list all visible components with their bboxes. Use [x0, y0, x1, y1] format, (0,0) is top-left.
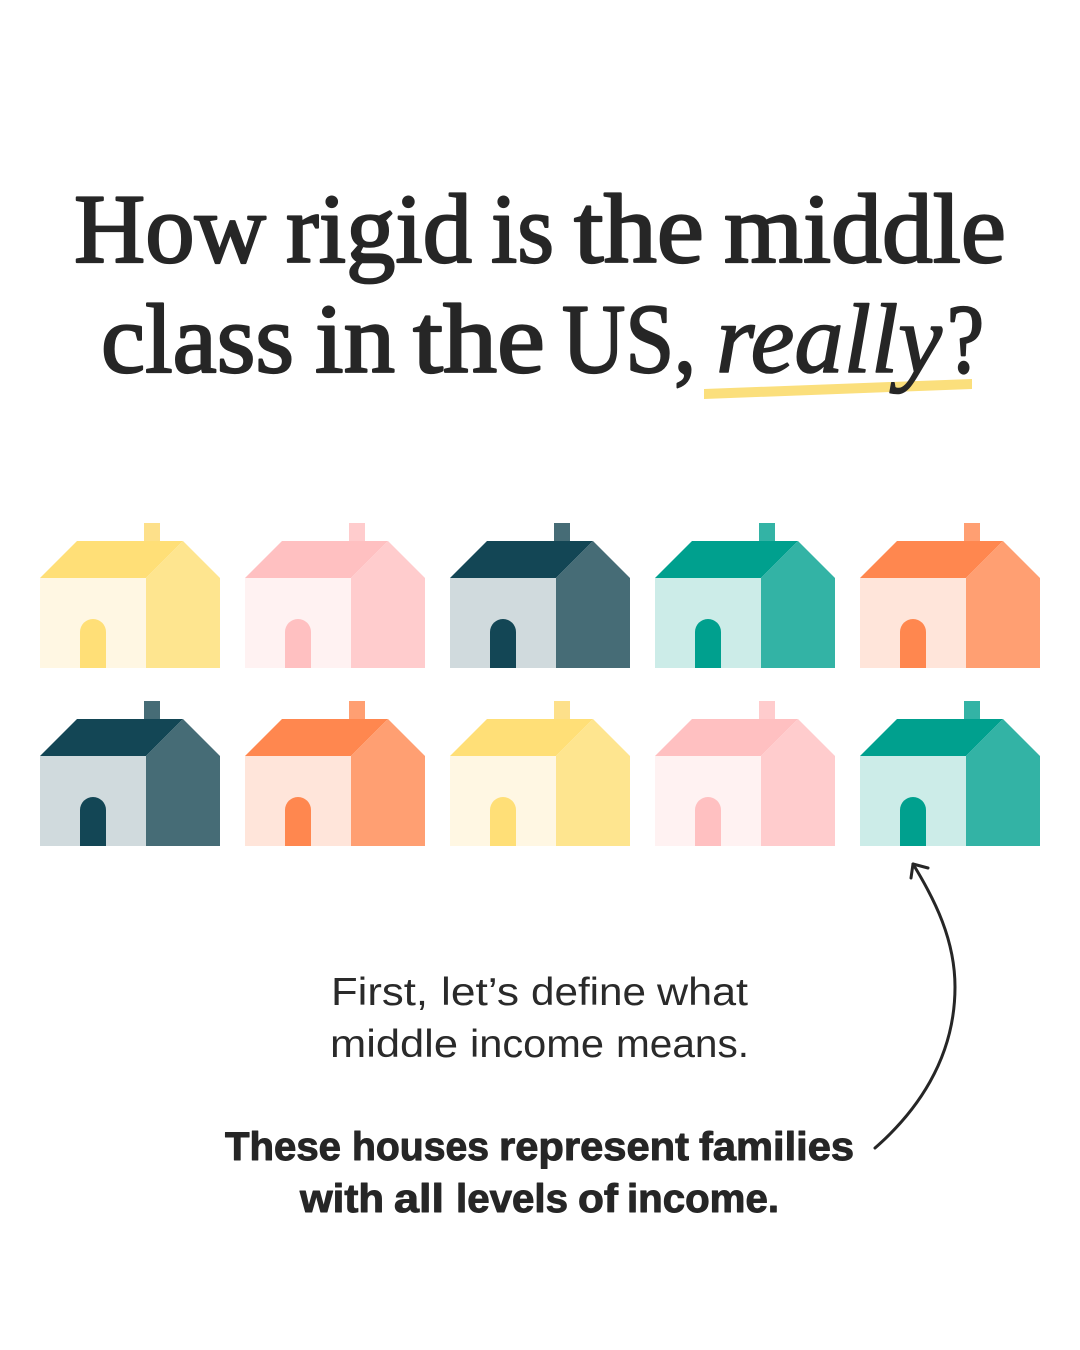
bold line 2: income. — [627, 1177, 779, 1221]
title — [74, 175, 1006, 399]
house: navy, row 2 — [40, 701, 220, 846]
title line 2: really — [716, 285, 942, 394]
intro text — [330, 971, 749, 1066]
intro line 1: let’s — [441, 971, 519, 1014]
bold line 2: levels — [456, 1177, 568, 1221]
house: orange, row 1 — [860, 523, 1040, 668]
bold line 2 — [299, 1177, 779, 1221]
arrow pointing to teal house — [875, 864, 955, 1148]
intro line 2: income — [470, 1023, 604, 1066]
house: teal, row 2 — [860, 701, 1040, 846]
title line 1: is — [491, 175, 554, 284]
intro line 2: means. — [616, 1023, 749, 1066]
title line 1: the — [574, 175, 704, 284]
intro line 2: middle — [330, 1023, 458, 1066]
title line 2: class — [101, 285, 294, 394]
title line 1: middle — [724, 175, 1006, 284]
bold line 1: families — [699, 1125, 854, 1169]
bold line 1: These — [225, 1125, 341, 1169]
intro line 1: what — [656, 971, 748, 1014]
title line 2: ? — [947, 285, 984, 394]
bold line 1: houses — [352, 1125, 489, 1169]
title line 1: rigid — [286, 175, 472, 284]
intro line 2 — [330, 1023, 749, 1066]
house: yellow, row 1 — [40, 523, 220, 668]
title line 2: US, — [562, 285, 696, 394]
bold line 1: represent — [499, 1125, 689, 1169]
title line 2: the — [413, 285, 545, 394]
house grid — [40, 523, 1040, 846]
bold line 2: with — [299, 1177, 384, 1221]
underline highlight — [704, 379, 972, 399]
bold line 2: of — [578, 1177, 619, 1221]
intro line 1: First, — [331, 971, 428, 1014]
house: orange, row 2 — [245, 701, 425, 846]
bold explanation text — [225, 1125, 854, 1221]
house: yellow, row 2 — [450, 701, 630, 846]
house: teal, row 1 — [655, 523, 835, 668]
house: pink, row 1 — [245, 523, 425, 668]
title line 1 — [74, 175, 1006, 284]
title line 2 — [101, 285, 984, 394]
house: pink, row 2 — [655, 701, 835, 846]
intro line 1 — [331, 971, 748, 1014]
bold line 1 — [225, 1125, 854, 1169]
intro line 1: define — [531, 971, 646, 1014]
bold line 2: all — [394, 1177, 444, 1221]
title line 2: in — [315, 285, 395, 394]
title line 1: How — [74, 175, 266, 284]
house: navy, row 1 — [450, 523, 630, 668]
